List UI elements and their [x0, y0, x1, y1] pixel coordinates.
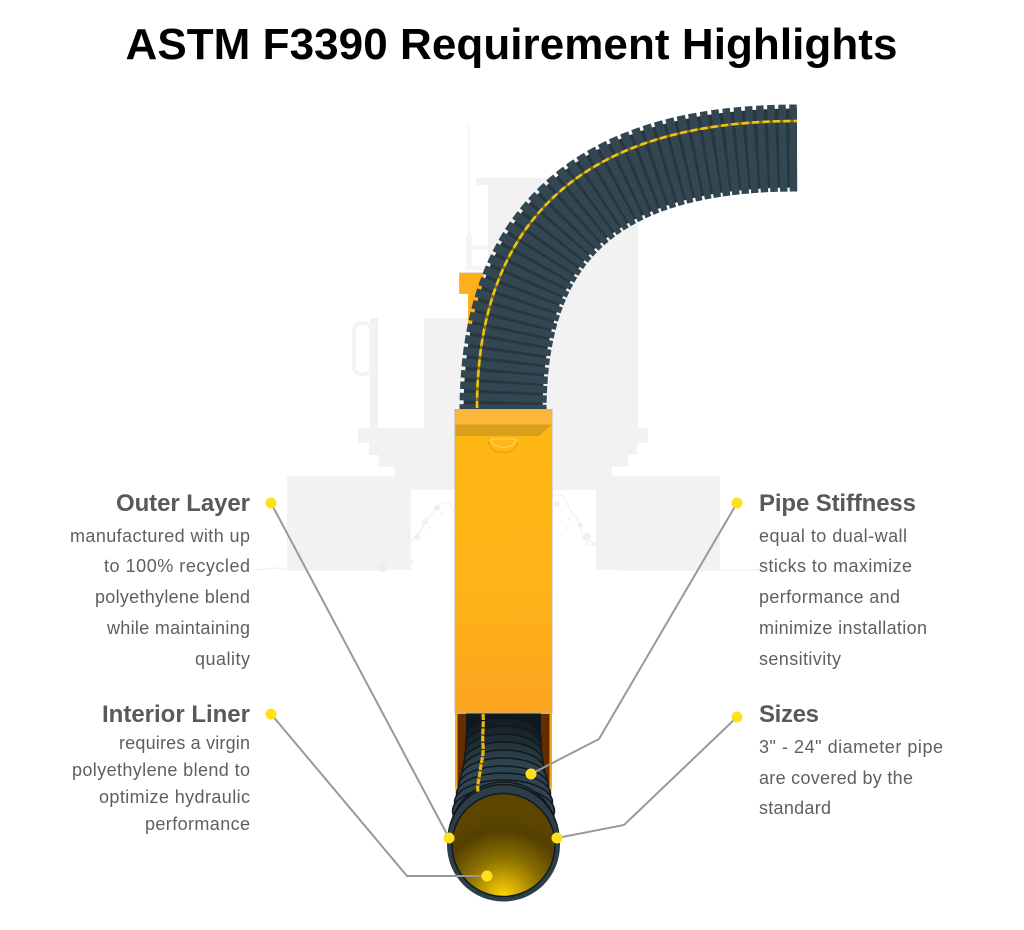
- callout: interior liner: polyethylene blend to: [72, 760, 250, 780]
- callout: pipe stiffness: sticks to maximize: [759, 556, 912, 576]
- callout: outer layer: [70, 490, 250, 669]
- callout: interior liner: Interior Liner: [102, 701, 250, 728]
- callout: pipe stiffness: [759, 490, 927, 669]
- callout: outer layer: Outer Layer: [116, 490, 250, 517]
- shaded band: [456, 424, 552, 436]
- pipe opening section below the trench box: [447, 712, 560, 902]
- callout: sizes: 3" - 24" diameter pipe: [759, 737, 943, 757]
- stripe on receding rings: [478, 714, 483, 792]
- background: faded machine silhouette: [255, 125, 760, 572]
- callout: outer layer: polyethylene blend: [95, 587, 250, 607]
- callout: outer layer: manufactured with up: [70, 526, 250, 546]
- dark pipe body at the back: [466, 713, 541, 753]
- trench box lower edge and dark interior: [455, 712, 552, 806]
- callout: outer layer: to 100% recycled: [104, 556, 250, 576]
- top band: [456, 410, 552, 424]
- callout: sizes: [759, 701, 943, 818]
- callout dots: [266, 498, 742, 882]
- callout: sizes: Sizes: [759, 701, 819, 728]
- callout: outer layer: quality: [195, 649, 250, 669]
- callout: outer layer: while maintaining: [106, 618, 250, 638]
- callout: pipe stiffness: minimize installation: [759, 618, 927, 638]
- callout: interior liner: performance: [145, 814, 250, 834]
- trench box: [455, 410, 552, 713]
- pipe interior: [452, 794, 555, 896]
- callout: sizes: standard: [759, 798, 831, 818]
- front rim: [447, 788, 560, 902]
- box handle: [489, 439, 517, 452]
- callout: pipe stiffness: equal to dual-wall: [759, 526, 907, 546]
- callout: sizes: are covered by the: [759, 768, 913, 788]
- leader lines: [271, 503, 737, 876]
- callout: interior liner: [72, 701, 250, 834]
- callout: interior liner: optimize hydraulic: [99, 787, 250, 807]
- callout: pipe stiffness: Pipe Stiffness: [759, 490, 916, 517]
- bent corrugated pipe: [477, 121, 797, 412]
- callout: interior liner: requires a virgin: [119, 733, 250, 753]
- title: ASTM F3390 Requirement Highlights: [126, 20, 898, 69]
- orange bracket behind pipe: [460, 273, 484, 327]
- callout: pipe stiffness: performance and: [759, 587, 900, 607]
- callout: pipe stiffness: sensitivity: [759, 649, 841, 669]
- yellow stripe: [477, 121, 797, 408]
- receding corrugation rings: [448, 718, 559, 896]
